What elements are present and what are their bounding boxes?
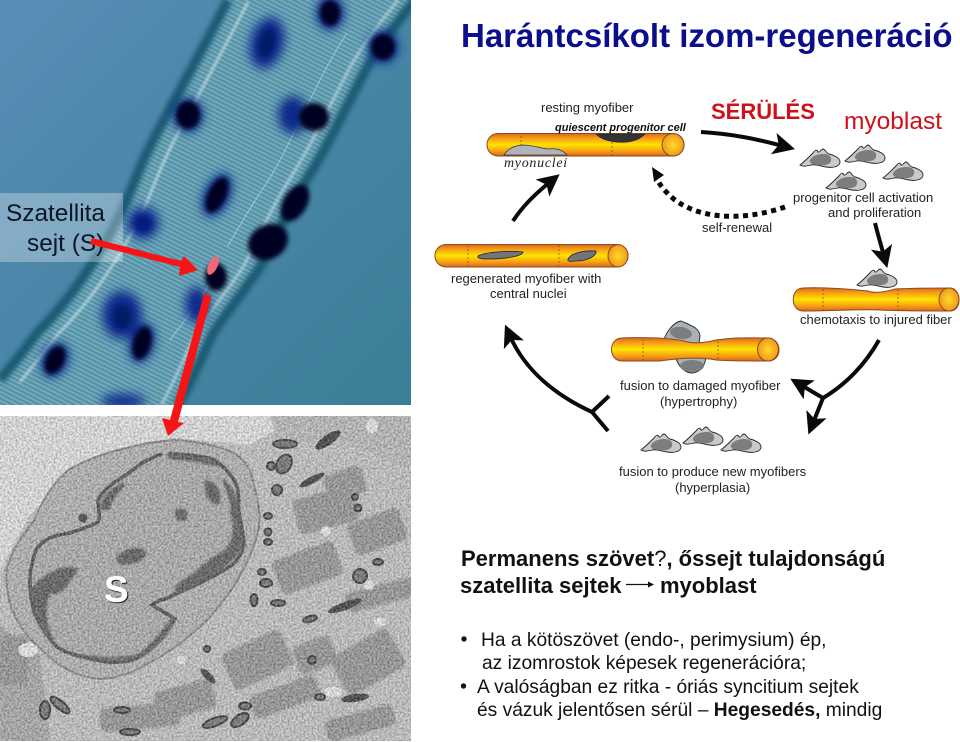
arrow: self-renewal dashed: self-renewal: [702, 220, 772, 235]
stage: fusion to produce new myofibers: [619, 427, 807, 495]
text: bullet points: az izomrostok képesek regenerációra;: [482, 653, 806, 674]
arrow: branching to fusion: [801, 340, 879, 423]
label: SÉRÜLÉS: SÉRÜLÉS: [711, 99, 815, 124]
label: myoblast: myoblast: [844, 108, 942, 135]
noise texture: [0, 416, 411, 741]
arrow: label to satellite cell: [90, 238, 198, 276]
arrow: self-renewal dashed: [652, 167, 785, 235]
stage: progenitor cell activation: and proliferation: [828, 205, 921, 220]
satellite cell body: [6, 440, 260, 679]
arrow: satellite cell to micrograph: [162, 294, 212, 436]
stage: resting myofiber: myonuclei: [504, 156, 568, 171]
nucleus: [30, 454, 244, 662]
text: bullet points: és vázuk jelentősen sérül – Hegesedés, mindig: [477, 700, 882, 721]
stage: regenerated myofiber: regenerated myofiber with: [451, 271, 601, 286]
satellite cell marker: [205, 255, 221, 276]
text: permanent tissue question: Permanens szövet?, őssejt tulajdonságú: [461, 546, 885, 571]
heterochromatin: [32, 452, 243, 661]
callout: Szatellita sejt (S): Szatellita: [6, 200, 105, 227]
photo: stained muscle fiber with nuclei: [0, 0, 415, 408]
stage: chemotaxis to injured fiber: [793, 269, 959, 327]
callout: Szatellita sejt (S): sejt (S): [27, 230, 104, 257]
stage: fusion to damaged myofiber: (hypertrophy): [660, 394, 737, 409]
callout: Szatellita sejt (S): [0, 193, 123, 262]
mitochondria: [40, 440, 383, 735]
text: bullet points: A valóságban ez ritka - óriás syncitium sejtek: [477, 677, 859, 698]
stage: progenitor cell activation: progenitor cell activation: [793, 190, 933, 205]
text: permanent tissue question: myoblast: [660, 573, 757, 598]
text: bullet points: [461, 630, 882, 721]
muscle fibrils: [0, 464, 416, 742]
photo: electron micrograph of satellite cell: [0, 416, 416, 742]
stage: resting myofiber: resting myofiber: [541, 100, 634, 115]
stage: chemotaxis to injured fiber: chemotaxis to injured fiber: [800, 312, 952, 327]
stage: resting myofiber: [487, 100, 687, 171]
arrow: activation to chemotaxis: [875, 223, 884, 256]
stage: resting myofiber: quiescent progenitor cell: [555, 122, 687, 134]
stage: fusion to produce new myofibers: fusion to produce new myofibers: [619, 464, 807, 479]
stage: regenerated myofiber: [435, 244, 628, 301]
label: S: S: [104, 569, 129, 610]
stage: fusion to produce new myofibers: (hyperplasia): [675, 480, 750, 495]
text: permanent tissue question: szatellita sejtek: [460, 573, 622, 598]
arrow: regenerated to resting: [513, 182, 550, 221]
stage: regenerated myofiber: central nuclei: [490, 286, 567, 301]
stage: progenitor cell activation: [793, 145, 933, 220]
text: bullet points: Ha a kötöszövet (endo-, perimysium) ép,: [481, 630, 827, 651]
stage: fusion to damaged myofiber: fusion to damaged myofiber: [620, 378, 781, 393]
title: Harántcsíkolt izom-regeneráció: [461, 17, 952, 54]
text: permanent tissue question: [460, 546, 885, 598]
arrow: resting to activation: [701, 132, 783, 146]
arrow: merging to regenerated fiber: [510, 336, 609, 431]
stage: fusion to damaged myofiber: [612, 321, 781, 409]
